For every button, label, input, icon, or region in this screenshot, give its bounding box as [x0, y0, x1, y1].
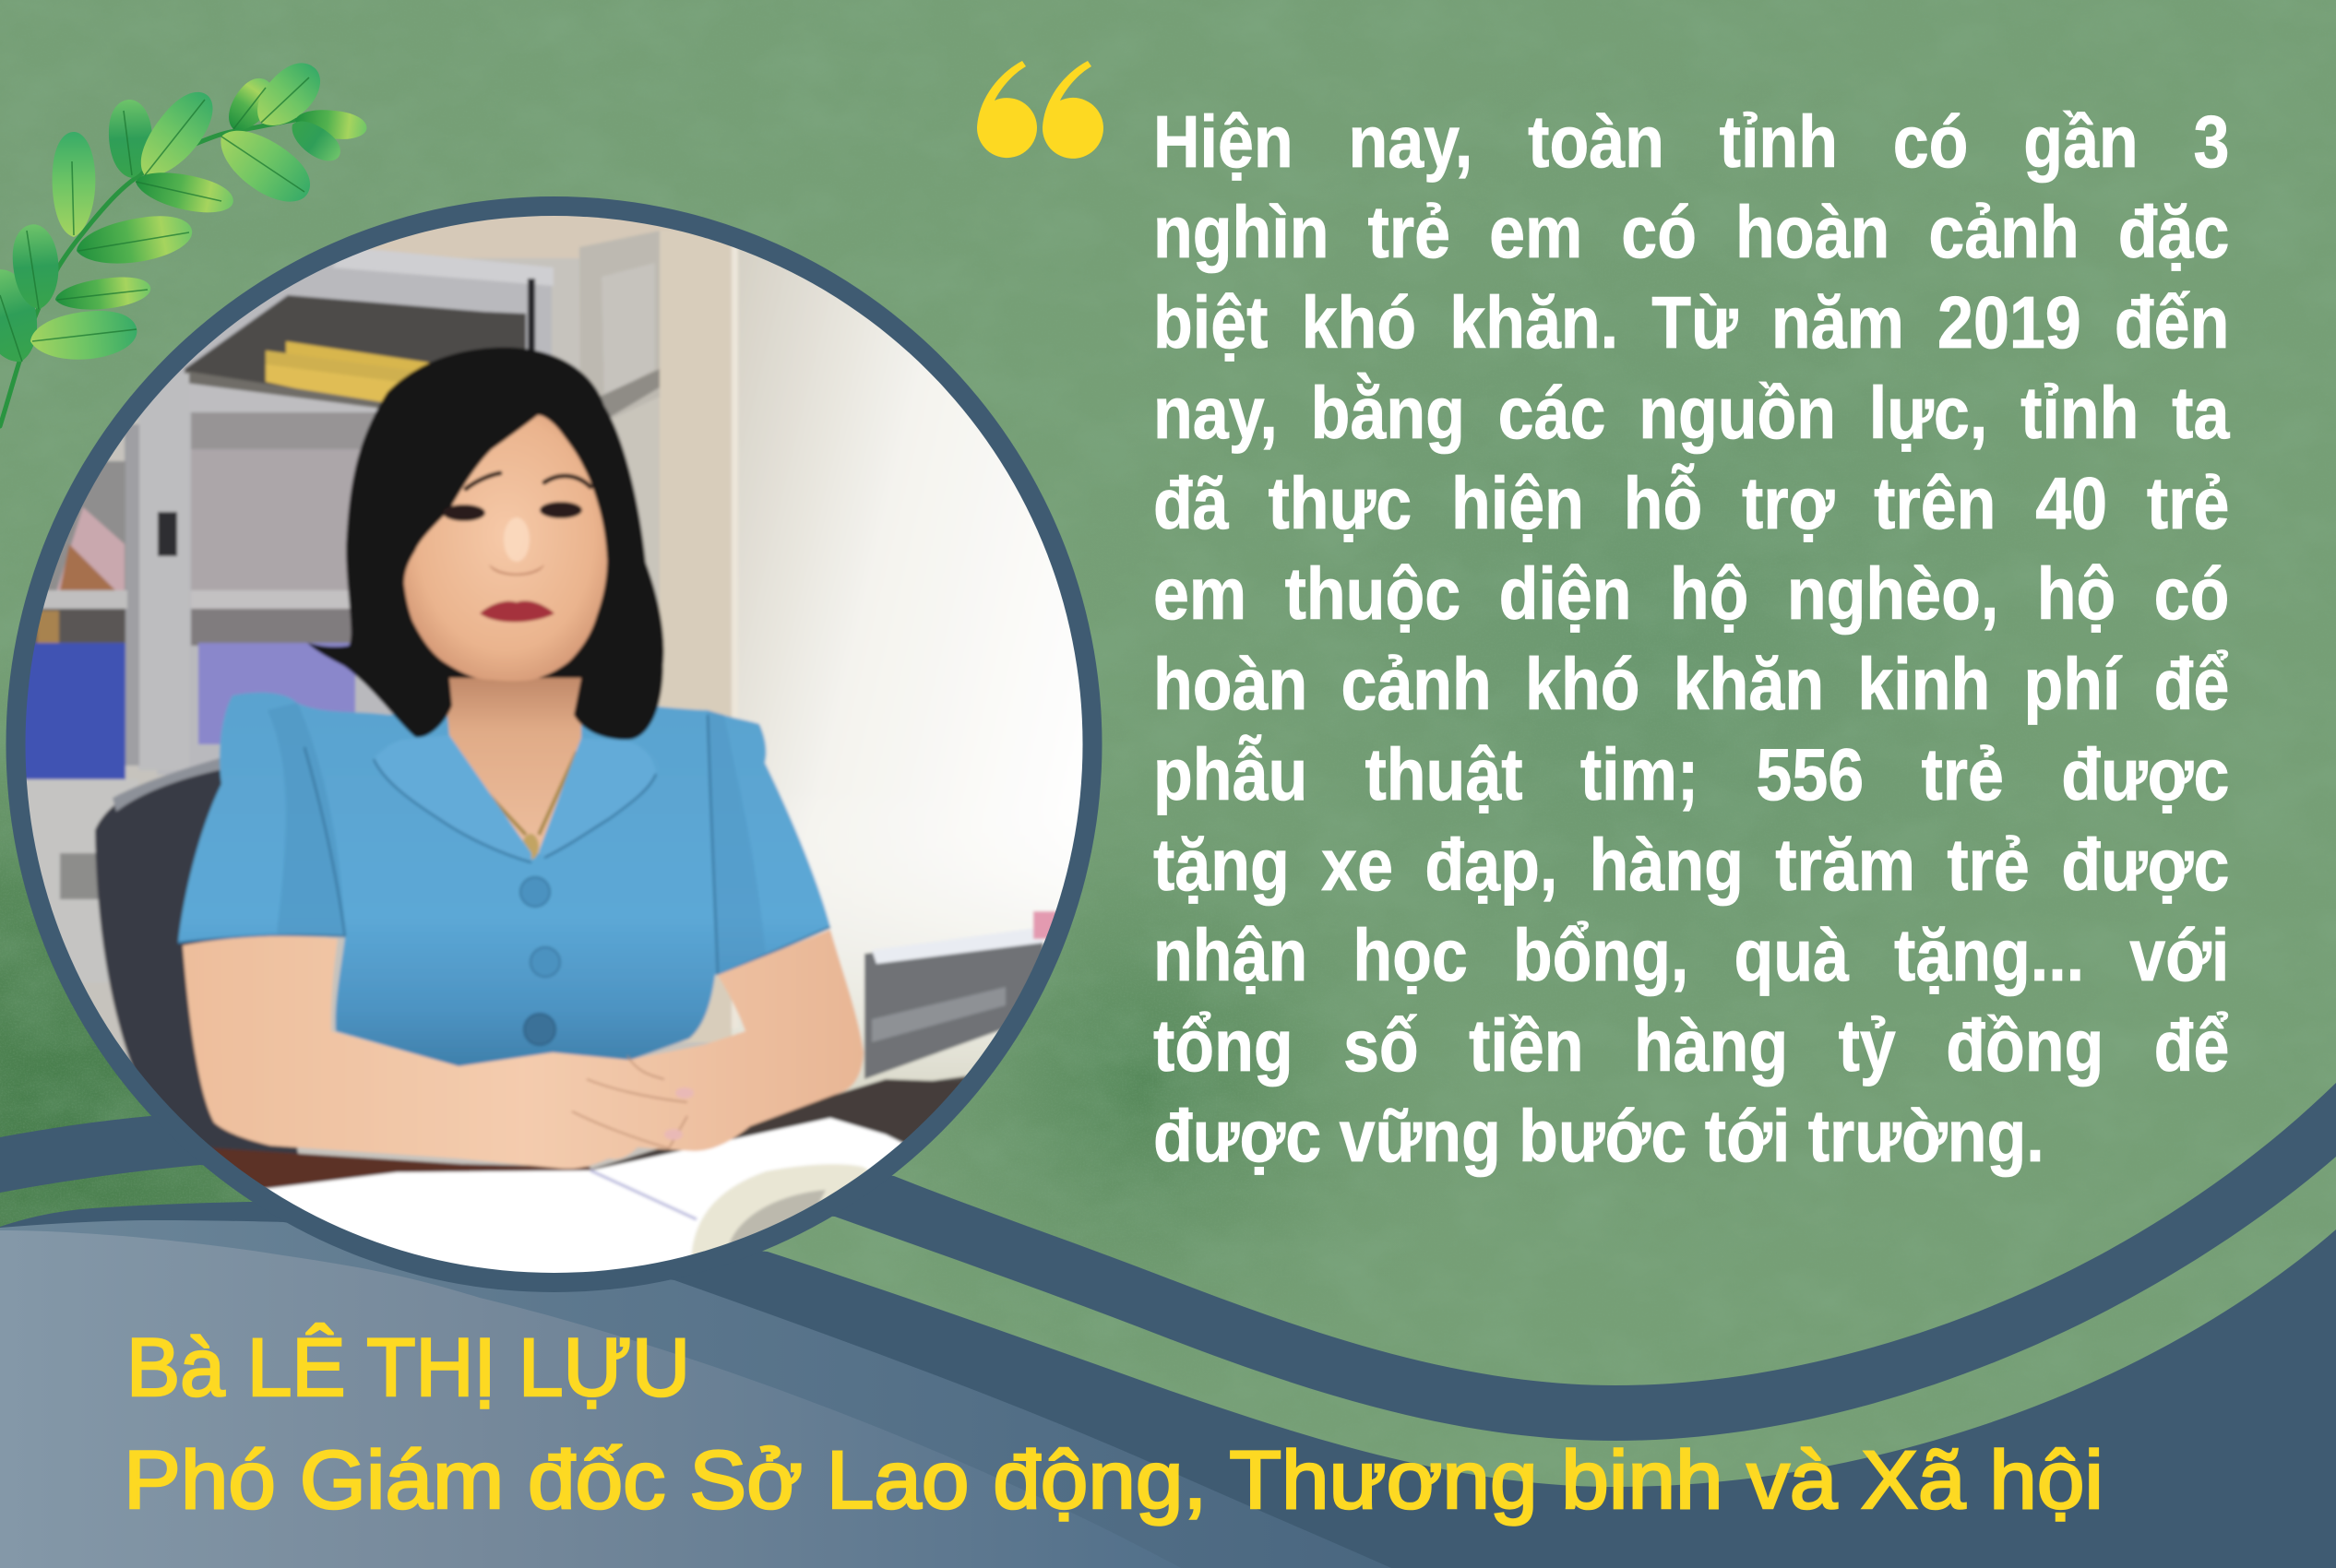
- collars: [374, 735, 531, 862]
- quote text block: phẫu thuật tim; 556 trẻ được: [1153, 733, 2229, 815]
- wave: mid blue-grey panel: [0, 1220, 1391, 1568]
- hair: [307, 348, 664, 740]
- desk: [211, 1146, 592, 1190]
- wave: light blue-grey panel: [0, 1230, 1181, 1568]
- necklace: [491, 751, 578, 837]
- quote text block: em thuộc diện hộ nghèo, hộ có: [1153, 552, 2229, 635]
- face: [404, 415, 607, 681]
- sleeve shading: [271, 707, 342, 933]
- book: [690, 1163, 869, 1254]
- quote text block: hoàn cảnh khó khăn kinh phí để: [1153, 643, 2229, 725]
- facial features: [466, 473, 590, 489]
- quote text block: nghìn trẻ em có hoàn cảnh đặc: [1153, 191, 2229, 273]
- wave: dark blue band: [0, 1083, 2336, 1441]
- quote text block: nay, bằng các nguồn lực, tỉnh ta: [1153, 372, 2229, 454]
- quote text block: Hiện nay, toàn tỉnh có gần 3: [1153, 101, 2229, 183]
- photo: woman seated in an office: [26, 216, 1083, 1273]
- paper: [264, 1115, 904, 1273]
- quote text block: biệt khó khăn. Từ năm 2019 đến: [1153, 281, 2229, 363]
- attribution: name and title: Phó Giám đốc Sở Lao động, Thương binh và Xã hội: [124, 1433, 2104, 1526]
- attribution: name and title: [124, 1321, 2104, 1526]
- quote text block: tặng xe đạp, hàng trăm trẻ được: [1153, 824, 2229, 906]
- dress: [178, 693, 830, 1066]
- attribution: name and title: Bà LÊ THỊ LỰU: [126, 1321, 690, 1413]
- icon: leaf branch: [0, 53, 368, 426]
- neck: [443, 664, 581, 853]
- arms and hands: [183, 930, 864, 1169]
- icon: opening quotation mark: [977, 61, 1103, 159]
- quote text block: [1153, 101, 2231, 1177]
- quote text block: tổng số tiền hàng tỷ đồng để: [1153, 1004, 2229, 1087]
- buttons: [520, 877, 550, 907]
- wave: solid dark blue lower area: [0, 1202, 2336, 1568]
- photo frame ring: [6, 196, 1102, 1292]
- quote text block: nhận học bổng, quà tặng... với: [1153, 914, 2229, 996]
- quote text block: được vững bước tới trường.: [1153, 1095, 2044, 1177]
- quote text block: đã thực hiện hỗ trợ trên 40 trẻ: [1153, 462, 2229, 544]
